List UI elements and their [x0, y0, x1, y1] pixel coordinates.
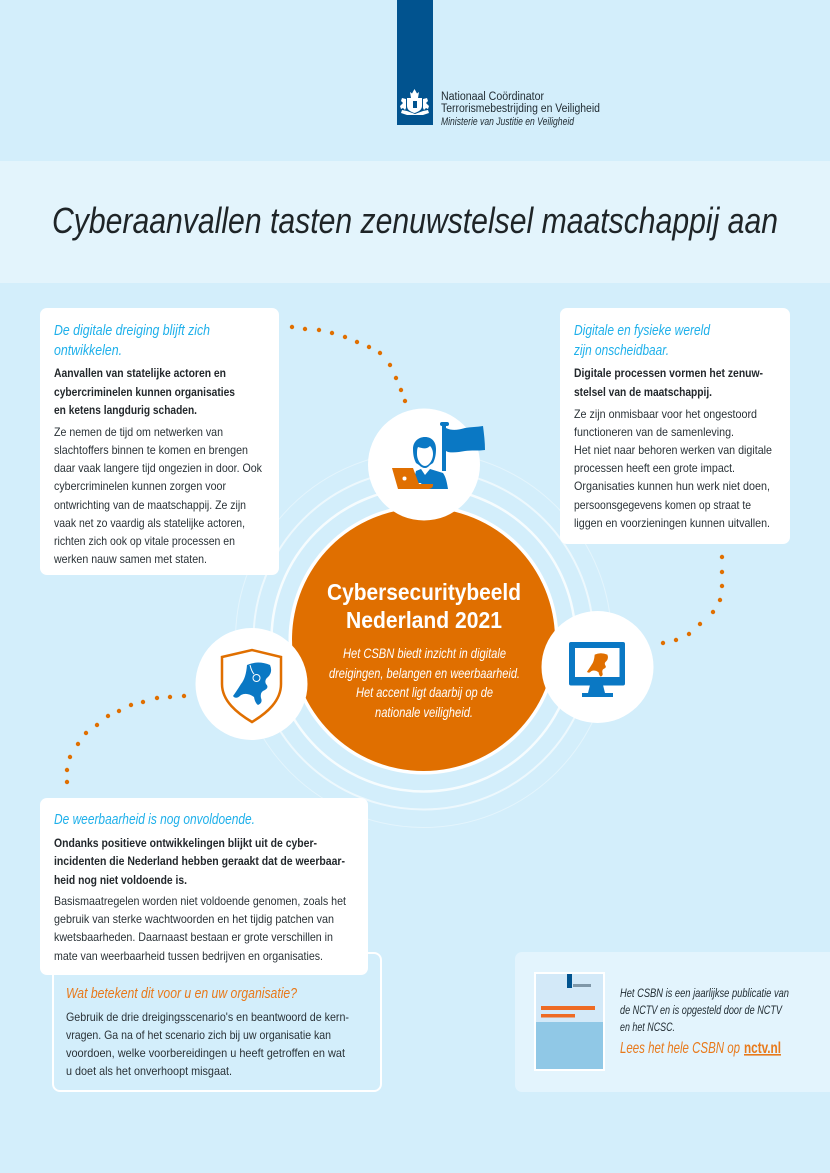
panel: publicatie CSBN: Lees het hele CSBN op: [620, 1040, 740, 1057]
panel: weerbaarheid: kwetsbaarheden. Daarnaast bestaan er grote verschillen in: [54, 930, 333, 944]
panel: digitale dreiging: vaak net zo vaardig als statelijke actoren,: [54, 516, 245, 530]
panel: publicatie CSBN: nctv.nl: [744, 1040, 781, 1057]
icon: report cover: [534, 972, 605, 1071]
panel: wat betekent dit voor u: vragen. Ga na of het scenario zich bij uw organisatie kan: [66, 1028, 331, 1042]
panel: digitale dreiging: ontwikkelen.: [54, 343, 122, 359]
icon: shield with map of the Netherlands: [196, 628, 308, 740]
panel: digitale en fysieke wereld: Het niet naar behoren werken van digitale: [574, 443, 772, 457]
panel: digitale dreiging: werken nauw samen met staten.: [53, 552, 207, 566]
panel: digitale en fysieke wereld: [560, 308, 790, 544]
panel: digitale dreiging: De digitale dreiging blijft zich: [54, 323, 210, 339]
panel: digitale dreiging: cybercriminelen kunnen organisaties: [54, 385, 235, 399]
panel: weerbaarheid: incidenten die Nederland hebben geraakt dat de weerbaar-: [54, 854, 345, 868]
panel: weerbaarheid: heid nog niet voldoende is.: [54, 873, 187, 887]
central circle: Cybersecuritybeeld Nederland 2021: Het accent ligt daarbij op de: [356, 684, 493, 700]
panel: wat betekent dit voor u: u doet als het onverhoopt misgaat.: [66, 1064, 232, 1078]
central circle: Cybersecuritybeeld Nederland 2021: Nederland 2021: [346, 607, 502, 633]
central circle: Cybersecuritybeeld Nederland 2021: [288, 504, 558, 774]
panel: digitale dreiging: richten zich ook op vitale processen en: [54, 534, 235, 548]
panel: digitale dreiging: daar vaak langere tijd ongezien in door. Ook: [54, 461, 263, 475]
central circle: Cybersecuritybeeld Nederland 2021: Het CSBN biedt inzicht in digitale: [343, 645, 506, 661]
panel: wat betekent dit voor u: voordoen, welke voorbereidingen u heeft getroffen en wat: [66, 1046, 346, 1060]
panel: digitale en fysieke wereld: functioneren van de samenleving.: [574, 425, 734, 439]
panel: wat betekent dit voor u: Wat betekent dit voor u en uw organisatie?: [66, 985, 298, 1002]
panel: digitale dreiging: ontwrichting van de maatschappij. Ze zijn: [54, 498, 246, 512]
central circle: Cybersecuritybeeld Nederland 2021: Cybersecuritybeeld: [327, 579, 521, 605]
panel: digitale dreiging: Ze nemen de tijd om netwerken van: [54, 425, 223, 439]
panel: wat betekent dit voor u: [53, 953, 381, 1091]
dotted arrows linking icons and panels: [65, 325, 724, 784]
panel: weerbaarheid: De weerbaarheid is nog onvoldoende.: [54, 812, 255, 828]
panel: weerbaarheid: mate van weerbaarheid tussen bedrijven en organisaties.: [54, 949, 323, 963]
panel: digitale en fysieke wereld: Organisaties kunnen hun werk niet doen,: [574, 479, 770, 493]
panel: digitale dreiging: Aanvallen van statelijke actoren en: [54, 366, 226, 380]
panel: publicatie CSBN: de NCTV en is opgesteld door de NCTV: [620, 1003, 783, 1017]
logo: Rijksoverheid ribbon and organisation name: Nationaal Coördinator: [441, 91, 544, 103]
panel: digitale en fysieke wereld: Digitale processen vormen het zenuw-: [574, 366, 763, 380]
icon: person with laptop and flag: [368, 408, 485, 520]
central circle: Cybersecuritybeeld Nederland 2021: dreigingen, belangen en weerbaarheid.: [329, 665, 520, 681]
title band: [0, 161, 830, 283]
panel: digitale en fysieke wereld: processen heeft een grote impact.: [574, 461, 735, 475]
logo: Rijksoverheid ribbon and organisation name: Ministerie van Justitie en Veiligheid: [441, 116, 575, 128]
panel: weerbaarheid: [40, 798, 368, 975]
panel: weerbaarheid: gebruik van sterke wachtwoorden en het tijdig patchen van: [54, 912, 334, 926]
panel: digitale dreiging: [40, 308, 279, 575]
panel: digitale dreiging: cybercriminelen kunnen zorgen voor: [54, 479, 226, 493]
panel: digitale en fysieke wereld: Ze zijn onmisbaar voor het ongestoord: [574, 407, 757, 421]
logo: Rijksoverheid ribbon and organisation name: [397, 0, 600, 128]
panel: digitale en fysieke wereld: stelsel van de maatschappij.: [574, 385, 712, 399]
panel: digitale en fysieke wereld: persoonsgegevens komen op straat te: [574, 498, 751, 512]
icon: monitor with map of the Netherlands: [542, 611, 654, 723]
central circle: Cybersecuritybeeld Nederland 2021: nationale veiligheid.: [375, 704, 473, 720]
panel: publicatie CSBN: [515, 952, 830, 1092]
panel: publicatie CSBN: en het NCSC.: [620, 1020, 675, 1034]
panel: weerbaarheid: Ondanks positieve ontwikkelingen blijkt uit de cyber-: [54, 836, 317, 850]
panel: digitale en fysieke wereld: liggen en voorzieningen kunnen uitvallen.: [574, 516, 770, 530]
panel: digitale dreiging: en ketens langdurig schaden.: [54, 403, 197, 417]
panel: digitale en fysieke wereld: Digitale en fysieke wereld: [574, 323, 711, 339]
concentric rings behind the central circle: [236, 452, 612, 828]
panel: digitale dreiging: slachtoffers binnen te komen en brengen: [54, 443, 248, 457]
panel: digitale en fysieke wereld: zijn onscheidbaar.: [573, 343, 669, 359]
panel: weerbaarheid: Basismaatregelen worden niet voldoende genomen, zoals het: [54, 894, 347, 908]
panel: wat betekent dit voor u: Gebruik de drie dreigingsscenario's en beantwoord de kern-: [66, 1010, 349, 1024]
logo: Rijksoverheid ribbon and organisation name: Terrorismebestrijding en Veiligheid: [441, 103, 600, 115]
